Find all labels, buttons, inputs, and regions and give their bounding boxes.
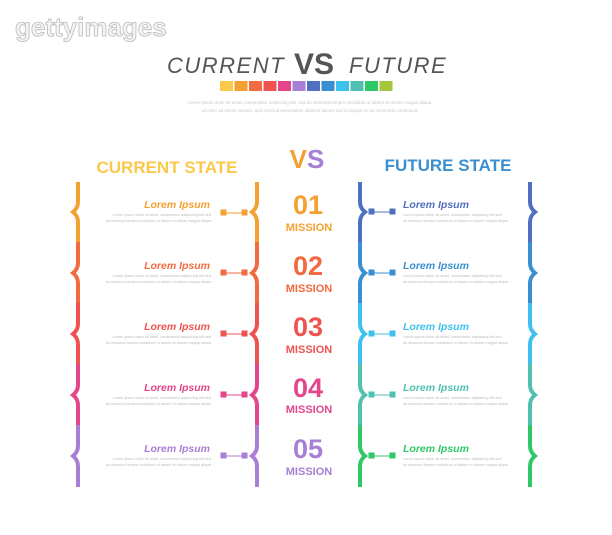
right text blocks: Lorem Ipsum [403, 382, 469, 394]
title: CURRENT [167, 53, 285, 78]
subtitle text: Lorem ipsum dolor sit amet, consectetur adipiscing elit, sed do eiusmod tempor incididunt ut labore et dolore magna aliqua. [187, 100, 433, 105]
panel: current state brackets [73, 182, 257, 487]
left text blocks: do eiusmod tempor incididunt ut labore et dolore magna aliqua [106, 219, 212, 223]
right text blocks: do eiusmod tempor incididunt ut labore et dolore magna aliqua [403, 402, 509, 406]
left text blocks: do eiusmod tempor incididunt ut labore et dolore magna aliqua [106, 280, 212, 284]
mission numbers: MISSION [286, 404, 332, 416]
mission numbers: MISSION [286, 283, 332, 295]
right text blocks: do eiusmod tempor incididunt ut labore et dolore magna aliqua [403, 341, 509, 345]
left text blocks: Lorem Ipsum [144, 260, 210, 272]
connectors right [369, 209, 395, 458]
right text blocks: Lorem ipsum dolor sit amet, consectetur adipiscing elit sed [403, 457, 502, 461]
left text blocks: do eiusmod tempor incididunt ut labore et dolore magna aliqua [106, 402, 212, 406]
mission numbers: 02 [293, 251, 323, 281]
mission numbers: MISSION [286, 344, 332, 356]
mission numbers: MISSION [286, 466, 332, 478]
right text blocks: do eiusmod tempor incididunt ut labore et dolore magna aliqua [403, 219, 509, 223]
subtitle text: Ut enim ad minim veniam, quis nostrud exercitation ullamco laboris nisi ut aliquip ex ea commodo consequat. [201, 108, 419, 113]
right text blocks: Lorem ipsum dolor sit amet, consectetur adipiscing elit sed [403, 396, 502, 400]
left text blocks: Lorem ipsum dolor sit amet, consectetur adipiscing elit sed [112, 335, 211, 339]
heading: future state: FUTURE STATE [385, 156, 511, 175]
title [167, 48, 447, 81]
left text blocks: Lorem ipsum dolor sit amet, consectetur adipiscing elit sed [112, 457, 211, 461]
right text blocks: Lorem ipsum dolor sit amet, consectetur adipiscing elit sed [403, 335, 502, 339]
left text blocks: Lorem Ipsum [144, 321, 210, 333]
subtitle text [187, 100, 433, 113]
right text blocks: do eiusmod tempor incididunt ut labore et dolore magna aliqua [403, 463, 509, 467]
right text blocks: Lorem ipsum dolor sit amet, consectetur adipiscing elit sed [403, 274, 502, 278]
right text blocks: Lorem ipsum dolor sit amet, consectetur adipiscing elit sed [403, 213, 502, 217]
left text blocks [106, 199, 212, 467]
panel: future state brackets [360, 182, 535, 487]
title: VS [294, 48, 334, 81]
left text blocks: do eiusmod tempor incididunt ut labore et dolore magna aliqua [106, 463, 212, 467]
left text blocks: Lorem Ipsum [144, 199, 210, 211]
mission numbers: 04 [293, 373, 323, 403]
left text blocks: Lorem Ipsum [144, 443, 210, 455]
right text blocks: Lorem Ipsum [403, 199, 469, 211]
right text blocks: Lorem Ipsum [403, 260, 469, 272]
connectors left [221, 210, 247, 458]
left text blocks: Lorem ipsum dolor sit amet, consectetur adipiscing elit sed [112, 274, 211, 278]
mission numbers: 03 [293, 312, 323, 342]
left text blocks: do eiusmod tempor incididunt ut labore et dolore magna aliqua [106, 341, 212, 345]
title: FUTURE [349, 53, 447, 78]
heading: current state: CURRENT STATE [96, 158, 238, 177]
heading: vs: VS [290, 144, 324, 174]
right text blocks [403, 199, 509, 467]
left text blocks: Lorem ipsum dolor sit amet, consectetur adipiscing elit sed [112, 396, 211, 400]
mission numbers: MISSION [286, 222, 332, 234]
watermark: gettyimages [15, 12, 167, 42]
mission numbers: 01 [293, 190, 323, 220]
left text blocks: Lorem Ipsum [144, 382, 210, 394]
right text blocks: Lorem Ipsum [403, 443, 469, 455]
left text blocks: Lorem ipsum dolor sit amet, consectetur adipiscing elit sed [112, 213, 211, 217]
mission numbers [286, 190, 332, 478]
right text blocks: Lorem Ipsum [403, 321, 469, 333]
mission numbers: 05 [293, 434, 323, 464]
right text blocks: do eiusmod tempor incididunt ut labore et dolore magna aliqua [403, 280, 509, 284]
color swatches [220, 81, 392, 91]
